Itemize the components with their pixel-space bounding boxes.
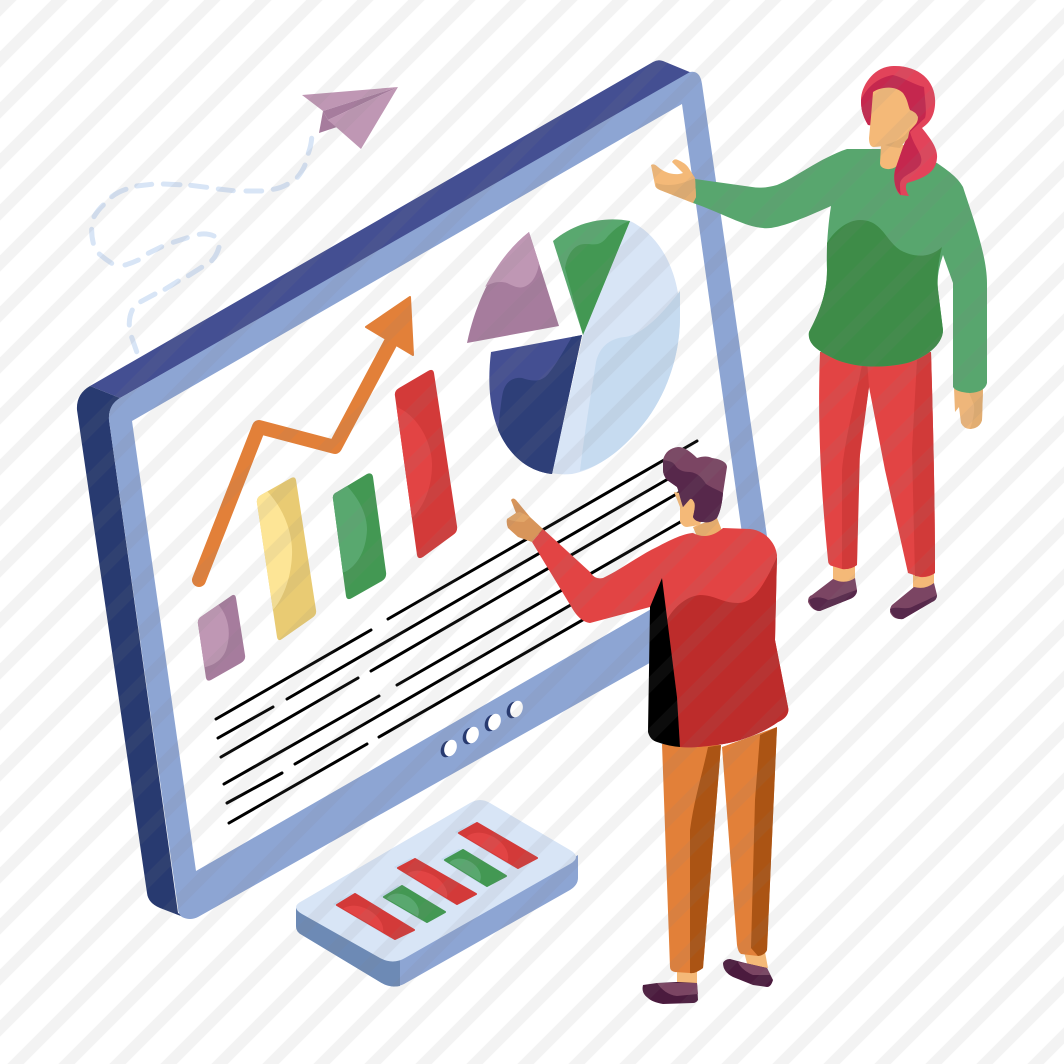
- monitor top edge: [90, 60, 692, 398]
- figure: woman pointing: [651, 66, 987, 619]
- monitor screen: [132, 104, 745, 871]
- woman lower hand: [954, 388, 983, 429]
- panel: monitor: [77, 60, 774, 919]
- key shadows: [333, 822, 532, 938]
- monitor buttons: [438, 699, 525, 759]
- bar: yellow: [250, 477, 316, 640]
- woman sweater: [693, 149, 987, 393]
- man face: [674, 492, 703, 527]
- key: red 3: [458, 822, 538, 869]
- man shoes: [643, 959, 773, 1004]
- pie chart: [467, 219, 680, 474]
- pie slice: purple: [467, 232, 559, 343]
- arrow: rising trend line: [199, 297, 413, 580]
- woman face: [869, 88, 918, 148]
- man neck: [693, 518, 723, 540]
- bar: red: [390, 370, 457, 558]
- panel: keyboard: [296, 800, 578, 987]
- pie slice: navy: [489, 335, 582, 474]
- man hand: [507, 498, 543, 542]
- monitor left side: [77, 386, 186, 918]
- monitor front frame: [109, 72, 774, 919]
- woman shoes: [808, 578, 937, 619]
- pie slice: green: [553, 219, 630, 335]
- dashed flight path: [92, 138, 312, 352]
- man hair: [663, 447, 727, 522]
- man sweater black panel: [648, 578, 680, 747]
- key: green 2: [444, 849, 507, 887]
- woman neck: [880, 145, 906, 169]
- man trousers: [662, 727, 777, 973]
- woman raised hand: [651, 159, 696, 203]
- keyboard sides: [296, 855, 578, 987]
- bar: green: [332, 473, 386, 600]
- woman ankles: [833, 565, 934, 590]
- pie slice: light blue: [552, 221, 680, 474]
- text lines on screen: [216, 441, 697, 823]
- figure: man pointing: [507, 447, 788, 1004]
- bar: purple: [198, 594, 246, 681]
- key: red 1: [336, 893, 415, 940]
- woman trousers: [819, 352, 935, 577]
- keyboard top: [296, 800, 576, 962]
- man ankles: [677, 952, 768, 984]
- bar chart: [190, 370, 457, 681]
- woman hair: [861, 66, 937, 196]
- man sweater: [532, 528, 788, 747]
- icon: paper plane: [302, 87, 398, 149]
- key: green 1: [383, 885, 446, 923]
- key: red 2: [397, 858, 477, 905]
